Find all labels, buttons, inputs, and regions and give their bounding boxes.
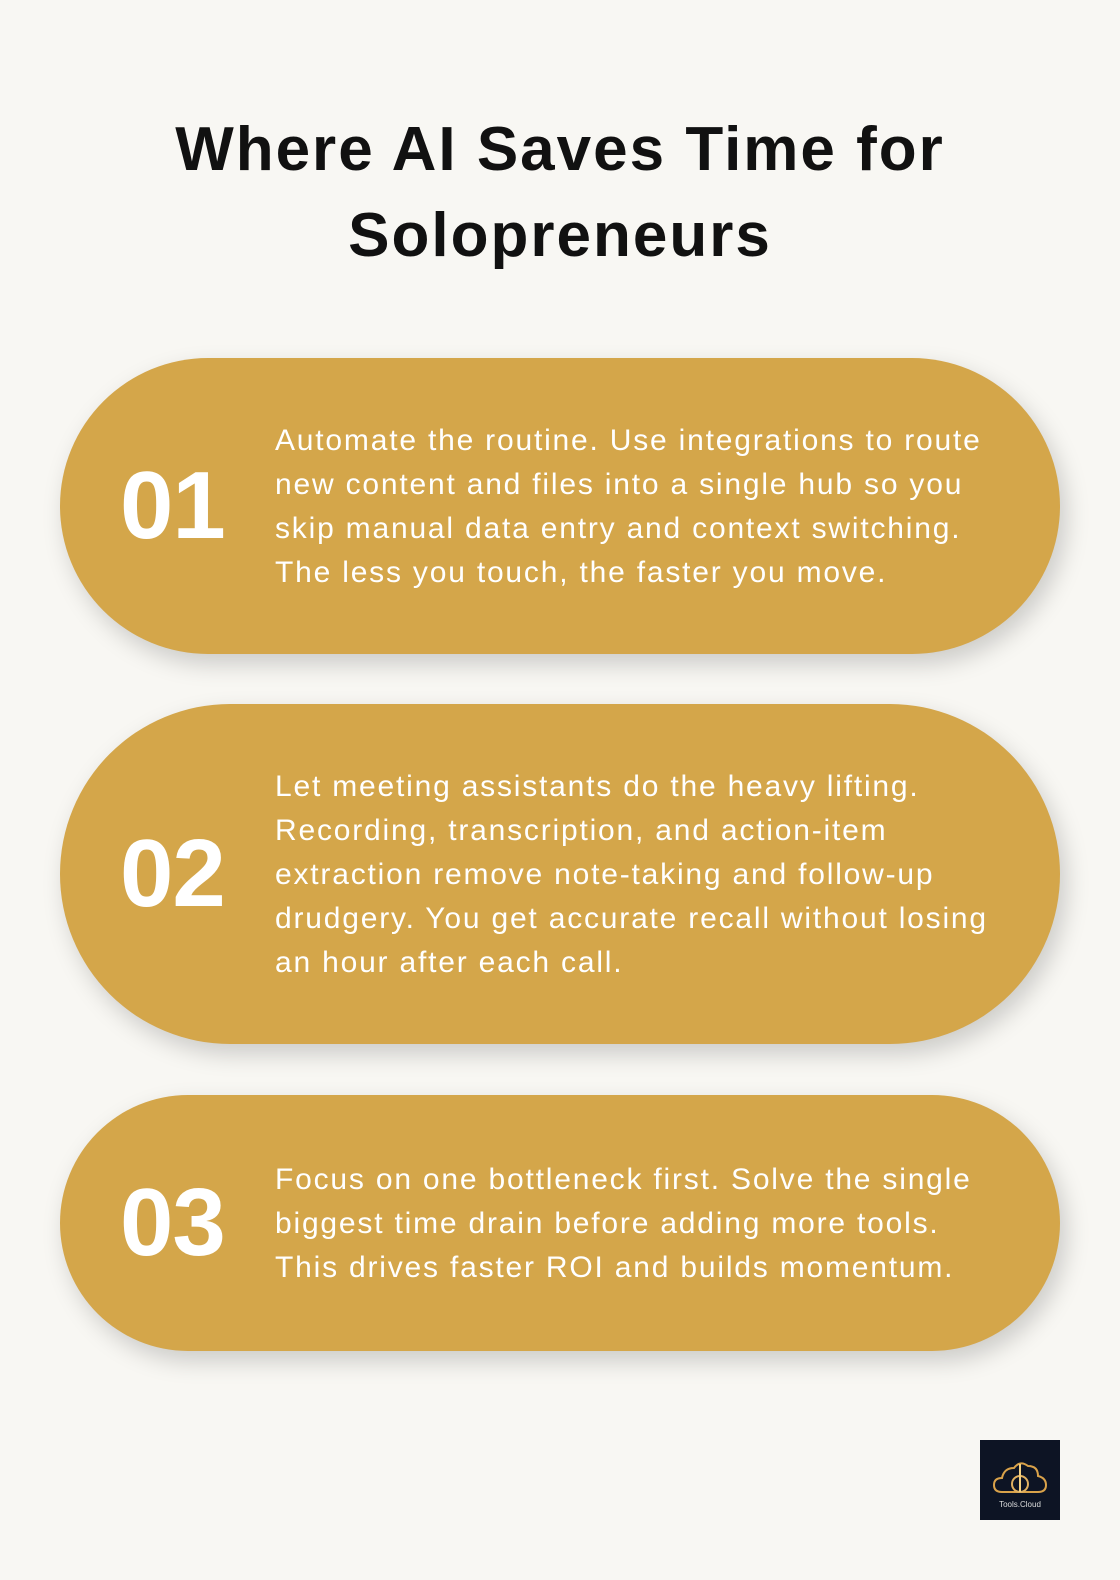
- text 03: [275, 1163, 972, 1284]
- text 01: Automate the routine. Use integrations to route: [275, 424, 982, 457]
- number 03: 03: [120, 1169, 225, 1276]
- title: Solopreneurs: [348, 201, 772, 270]
- text 03: This drives faster ROI and builds momentum.: [275, 1251, 954, 1284]
- logo: [980, 1440, 1060, 1520]
- panel: step 02: [60, 704, 1060, 1044]
- text 02: [275, 770, 988, 979]
- text 01: The less you touch, the faster you move.: [275, 556, 887, 589]
- text 01: [275, 424, 982, 589]
- text 01: skip manual data entry and context switching.: [275, 512, 961, 545]
- text 02: an hour after each call.: [275, 946, 623, 979]
- number 02: 02: [120, 820, 225, 927]
- title: [175, 115, 945, 270]
- text 02: Recording, transcription, and action-item: [275, 814, 887, 847]
- panel: step 03: [60, 1095, 1060, 1351]
- title: Where AI Saves Time for: [175, 115, 945, 184]
- panel: step 01: [60, 358, 1060, 654]
- text 02: extraction remove note-taking and follow-up: [275, 858, 934, 891]
- text 03: Focus on one bottleneck first. Solve the single: [275, 1163, 972, 1196]
- text 02: Let meeting assistants do the heavy lifting.: [275, 770, 920, 803]
- text 03: biggest time drain before adding more tools.: [275, 1207, 940, 1240]
- number 01: 01: [120, 452, 225, 559]
- text 01: new content and files into a single hub so you: [275, 468, 963, 501]
- text 02: drudgery. You get accurate recall without losing: [275, 902, 988, 935]
- logo: Tools.Cloud: [999, 1500, 1041, 1509]
